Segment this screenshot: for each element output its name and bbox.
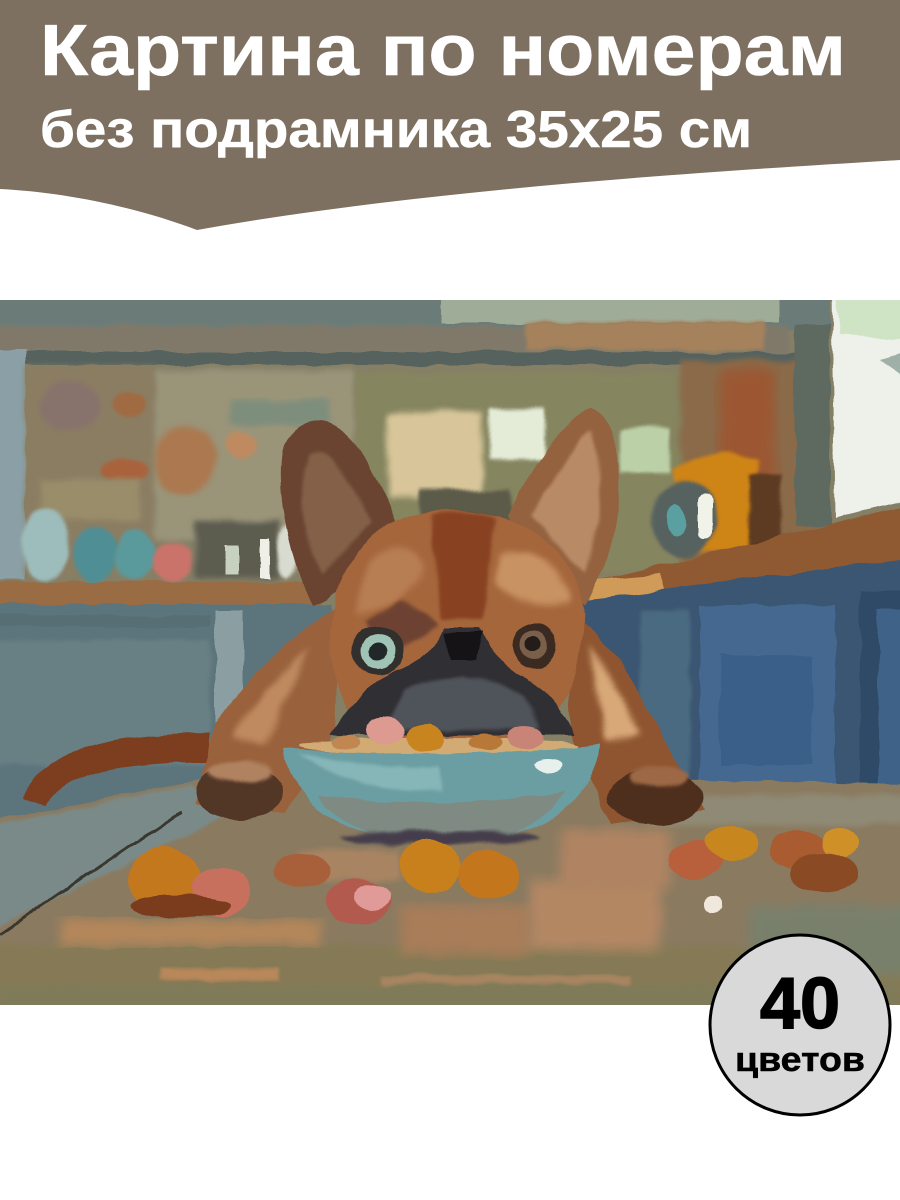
left ear (281, 421, 395, 605)
front legs and shoulders (195, 605, 340, 815)
wooden shelf (0, 582, 320, 605)
blue cabinets (0, 555, 900, 824)
header banner (0, 0, 900, 230)
teal bowl (283, 744, 600, 845)
subtitle: без подрамника 35х25 см (40, 101, 752, 159)
badge: 40 colours (710, 935, 890, 1115)
orange mixer (653, 454, 780, 556)
eyes (352, 625, 404, 675)
kitchen wall background (0, 300, 900, 780)
badge number: 40 (760, 964, 840, 1044)
dog (195, 410, 705, 825)
food in bowl (300, 716, 580, 755)
muzzle (330, 628, 575, 735)
badge label: цветов (735, 1041, 865, 1079)
brown chair back (25, 733, 210, 805)
table top (0, 780, 900, 1030)
paws (196, 770, 283, 821)
shelf jars (21, 510, 298, 583)
right ear (505, 410, 619, 605)
kibble on table (129, 826, 859, 926)
painting: french bulldog at a food bowl (0, 280, 900, 1030)
head (330, 510, 584, 740)
title: Картина по номерам (40, 11, 846, 91)
